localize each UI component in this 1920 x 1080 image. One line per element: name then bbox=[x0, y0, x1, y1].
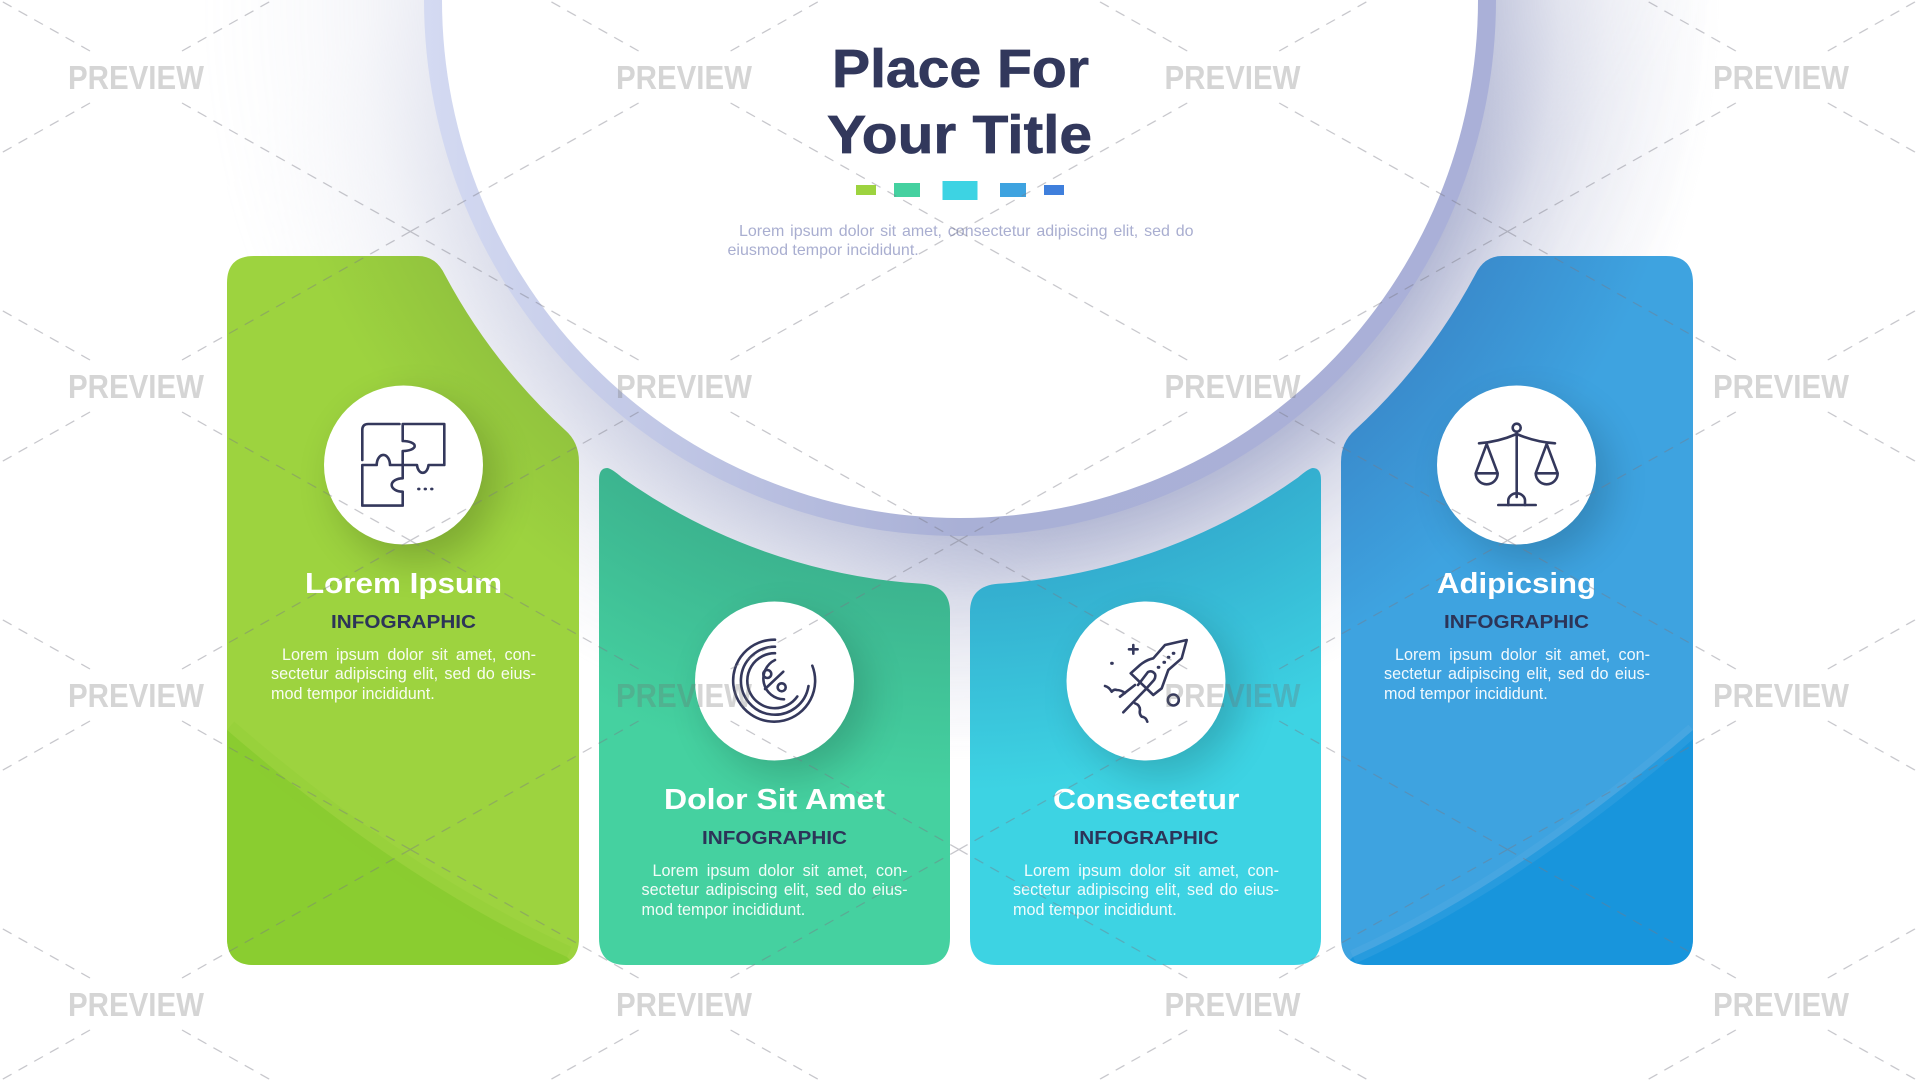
card shape bbox=[970, 468, 1321, 965]
preview watermarks: PREVIEW bbox=[68, 986, 205, 1023]
preview watermarks: PREVIEW bbox=[1713, 368, 1850, 405]
bottom crescent bbox=[227, 730, 570, 965]
preview watermarks: PREVIEW bbox=[68, 368, 205, 405]
icon disc bbox=[1437, 386, 1610, 561]
card shape bbox=[1341, 256, 1693, 965]
body text bbox=[271, 646, 536, 706]
icon: percent radar bbox=[733, 640, 815, 722]
panel: dolor sit amet bbox=[599, 468, 950, 965]
bottom crescent bbox=[1350, 730, 1693, 965]
large white circle with ring bbox=[424, 0, 1496, 536]
icon: puzzle bbox=[362, 424, 444, 506]
subheading: INFOGRAPHIC bbox=[702, 827, 847, 848]
body text: mod tempor incididunt. bbox=[1013, 901, 1177, 919]
preview watermarks: PREVIEW bbox=[616, 677, 753, 714]
body text bbox=[1013, 862, 1279, 922]
preview watermarks: PREVIEW bbox=[616, 59, 753, 96]
body text: mod tempor incididunt. bbox=[271, 685, 435, 703]
subheading: INFOGRAPHIC bbox=[331, 611, 476, 632]
subtitle text bbox=[728, 222, 1194, 264]
heading: Consectetur bbox=[1053, 784, 1240, 816]
preview watermarks: PREVIEW bbox=[1164, 677, 1301, 714]
large circle shadow bbox=[342, 0, 1672, 712]
icon disc bbox=[1066, 602, 1240, 777]
panel: adipicsing bbox=[1341, 256, 1693, 965]
preview watermarks: PREVIEW bbox=[68, 677, 205, 714]
subtitle text: eiusmod tempor incididunt. bbox=[728, 242, 919, 259]
body text: sectetur adipiscing elit, sed do eius- bbox=[271, 665, 536, 683]
preview watermarks: PREVIEW bbox=[616, 986, 753, 1023]
preview watermarks: PREVIEW bbox=[1713, 677, 1850, 714]
panel: lorem ipsum bbox=[227, 256, 579, 965]
heading: Lorem Ipsum bbox=[305, 568, 502, 600]
body text: Lorem ipsum dolor sit amet, con- bbox=[1024, 862, 1279, 880]
colour bars bbox=[856, 181, 1064, 200]
panel: consectetur bbox=[970, 468, 1321, 965]
body text bbox=[1384, 646, 1650, 706]
icon: scales bbox=[1476, 424, 1558, 505]
body text: Lorem ipsum dolor sit amet, con- bbox=[282, 646, 536, 664]
body text: Lorem ipsum dolor sit amet, con- bbox=[1395, 646, 1650, 664]
card shape bbox=[599, 468, 950, 965]
body text: mod tempor incididunt. bbox=[642, 901, 805, 919]
heading: Dolor Sit Amet bbox=[664, 784, 885, 816]
preview watermarks: PREVIEW bbox=[68, 59, 205, 96]
body text: sectetur adipiscing elit, sed do eius- bbox=[642, 881, 908, 899]
body text: mod tempor incididunt. bbox=[1384, 685, 1548, 703]
body text: sectetur adipiscing elit, sed do eius- bbox=[1013, 881, 1279, 899]
icon disc bbox=[324, 386, 497, 561]
subheading: INFOGRAPHIC bbox=[1444, 611, 1589, 632]
body text bbox=[642, 862, 908, 922]
preview watermarks: PREVIEW bbox=[1164, 368, 1301, 405]
body text: Lorem ipsum dolor sit amet, con- bbox=[652, 862, 908, 880]
title: Your Title bbox=[827, 105, 1092, 165]
preview watermarks: PREVIEW bbox=[616, 368, 753, 405]
subheading: INFOGRAPHIC bbox=[1074, 827, 1218, 848]
preview watermarks: PREVIEW bbox=[1164, 986, 1301, 1023]
icon disc bbox=[695, 602, 868, 777]
subtitle text: Lorem ipsum dolor sit amet, consectetur adipiscing elit, sed do bbox=[739, 223, 1194, 240]
heading: Adipicsing bbox=[1437, 568, 1596, 600]
card shape bbox=[227, 256, 579, 965]
preview watermarks: PREVIEW bbox=[1713, 986, 1850, 1023]
preview watermarks: PREVIEW bbox=[1164, 59, 1301, 96]
title: Place For bbox=[832, 39, 1089, 99]
preview watermarks: PREVIEW bbox=[1713, 59, 1850, 96]
title bbox=[827, 39, 1092, 165]
icon: rocket bbox=[1105, 640, 1187, 722]
body text: sectetur adipiscing elit, sed do eius- bbox=[1384, 665, 1650, 683]
